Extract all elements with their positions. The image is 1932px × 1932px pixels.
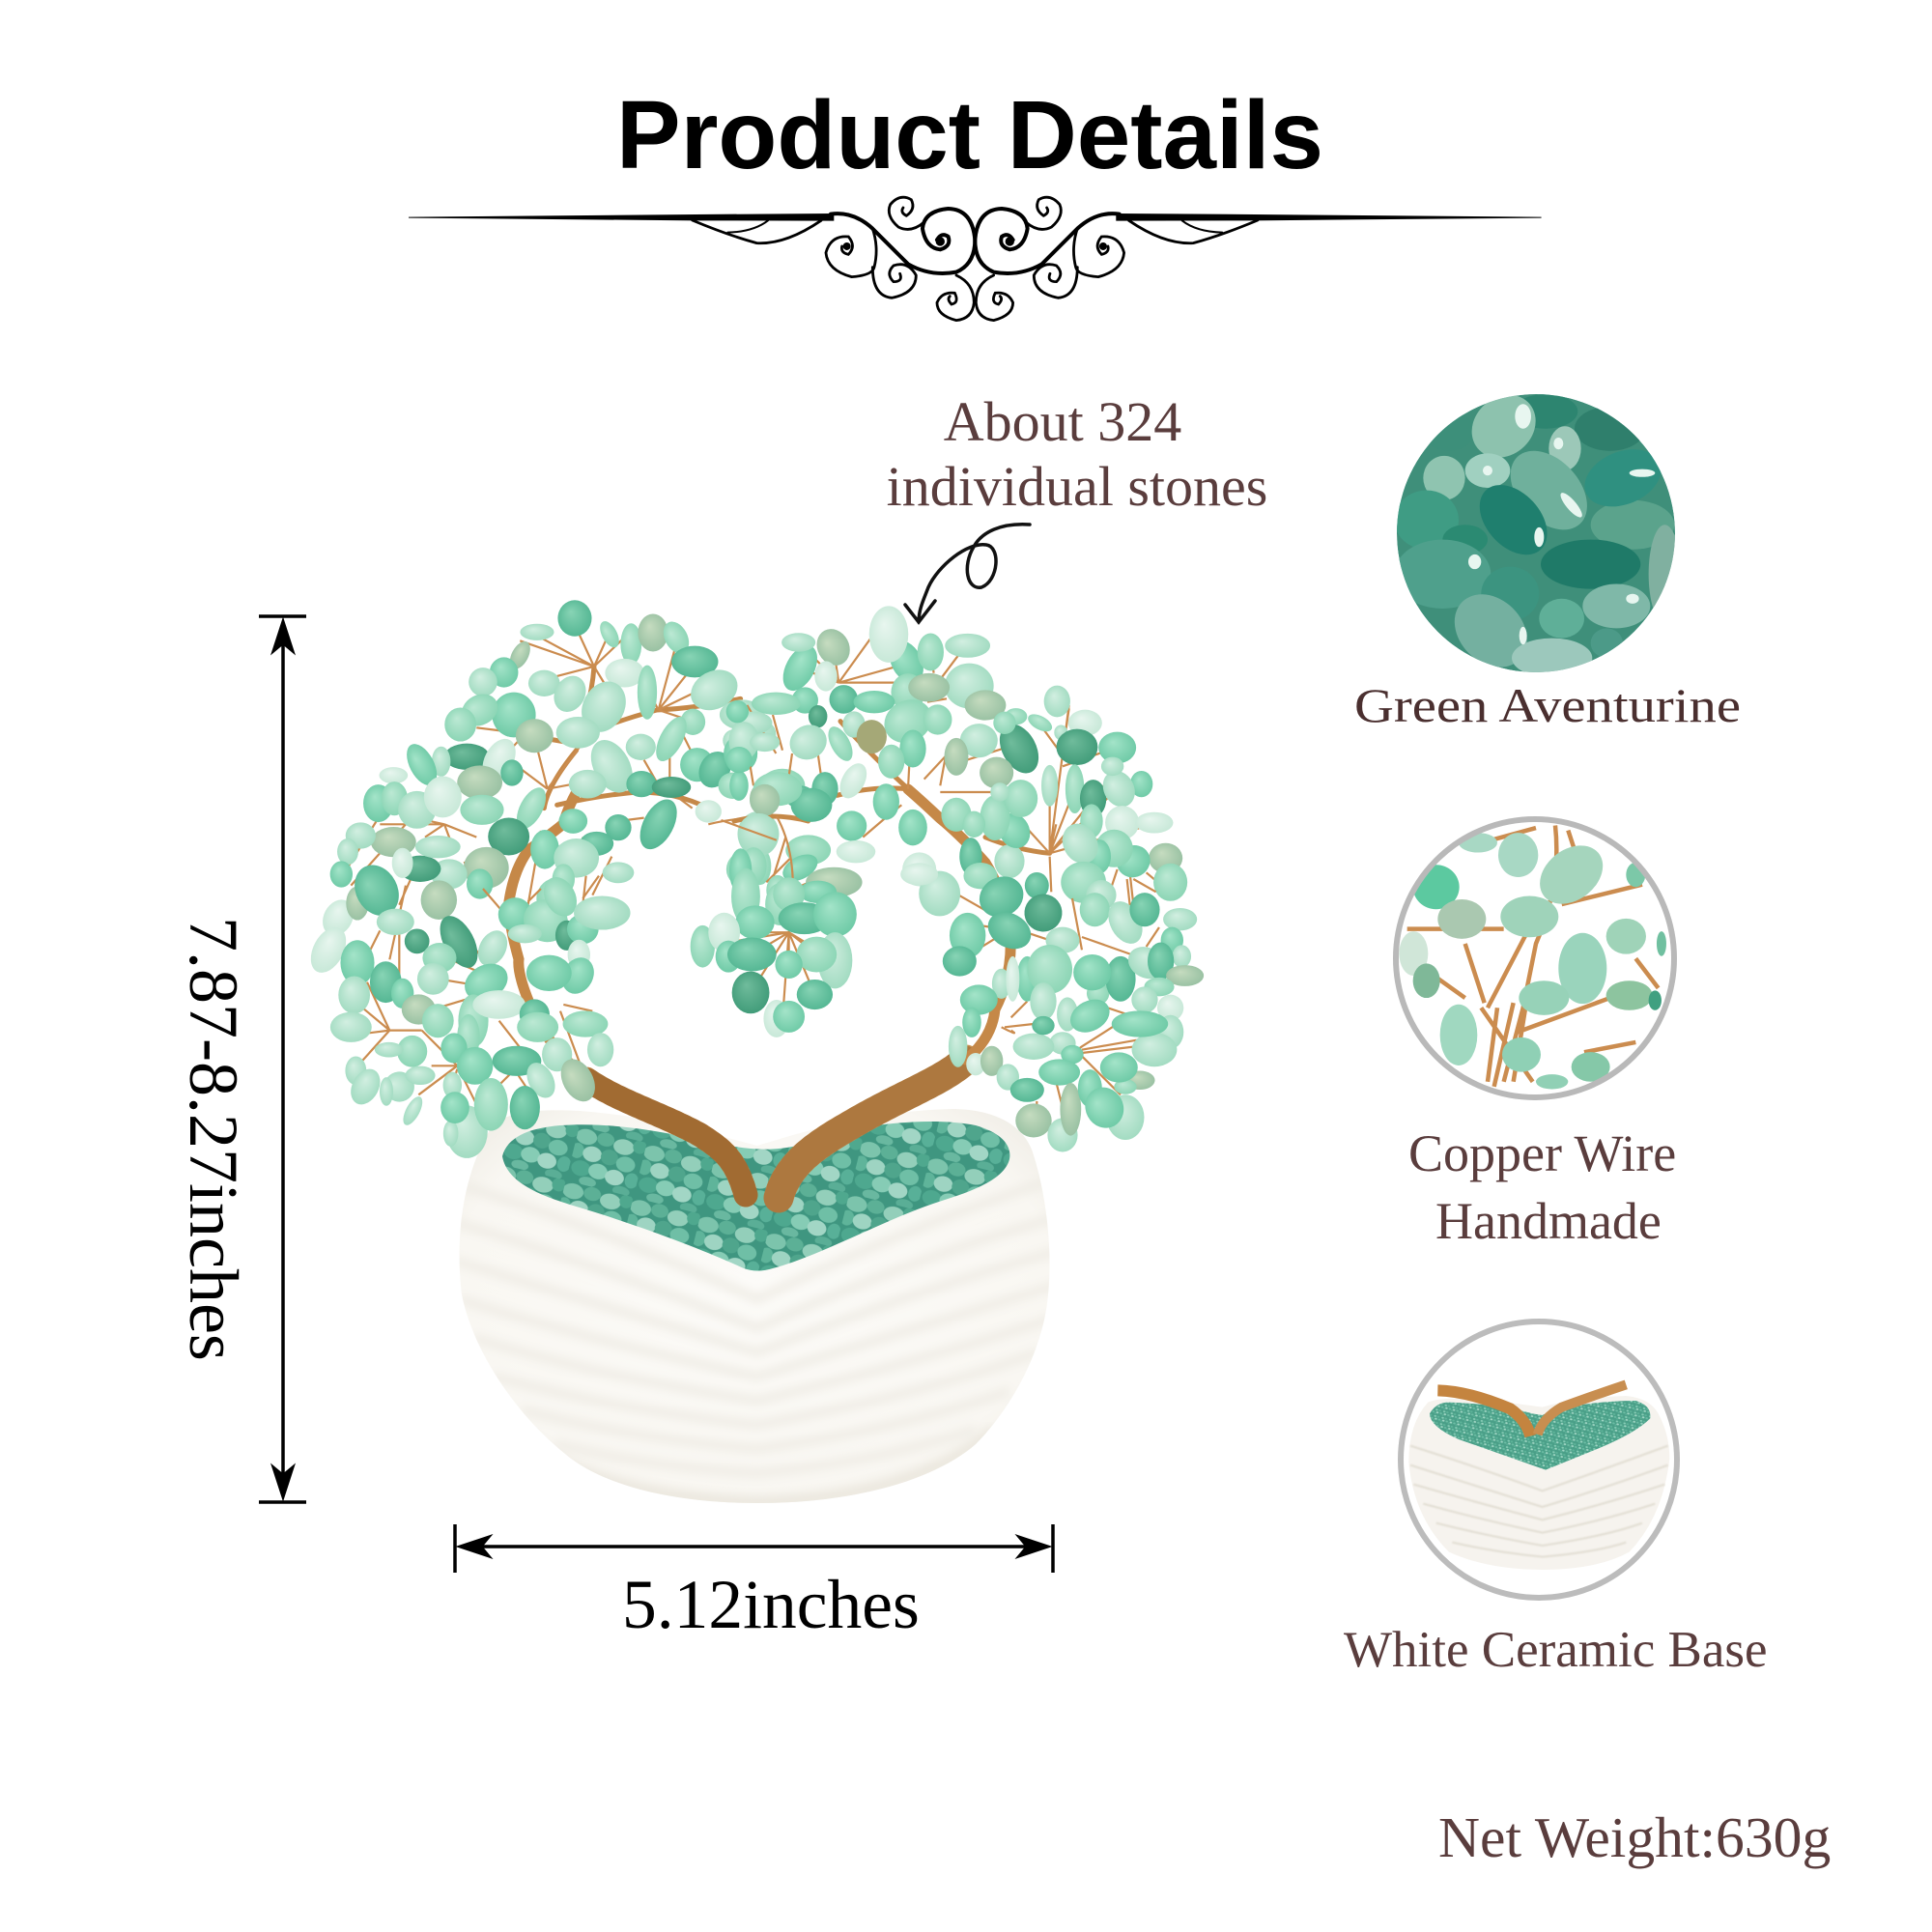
icon: curly callout arrow <box>905 525 1030 622</box>
heart-shaped canopy: lower left stones and wires <box>303 857 631 1158</box>
thumbnail: white ceramic base circle <box>1401 1321 1677 1598</box>
thumbnail: green aventurine stones circle <box>1394 387 1681 679</box>
horizontal dimension arrow <box>455 1524 1053 1573</box>
title: Product Details <box>616 81 1323 189</box>
heart-shaped canopy: upper left stones and wires <box>330 600 805 922</box>
gravel of green stones in heart opening <box>502 1122 1009 1271</box>
width label: 5.12inches <box>622 1567 920 1643</box>
callout text: about 324 individual stones: individual stones <box>887 455 1267 518</box>
vertical dimension arrow <box>259 616 306 1502</box>
heart-shaped canopy: hanging centre cluster <box>691 816 857 1037</box>
height label: 7.87-8.27inches <box>175 917 252 1361</box>
heart-shaped canopy: lower right stones and wires <box>900 863 1204 1152</box>
net weight: Net Weight:630g <box>1438 1805 1831 1869</box>
callout text: about 324 individual stones: About 324 <box>944 390 1181 453</box>
thumbnail: copper wire circle <box>1396 819 1674 1097</box>
heart-shaped canopy: upper right stones and wires <box>725 606 1187 910</box>
label: green aventurine: Green Aventurine <box>1354 678 1741 732</box>
twisted copper trunks <box>509 787 1010 1198</box>
white ceramic pot <box>454 1109 1058 1503</box>
label: copper wire handmade: Copper Wire <box>1408 1124 1676 1182</box>
label: copper wire handmade: Handmade <box>1435 1192 1662 1250</box>
label: white ceramic base: White Ceramic Base <box>1344 1622 1768 1678</box>
ornamental title divider <box>409 197 1542 321</box>
